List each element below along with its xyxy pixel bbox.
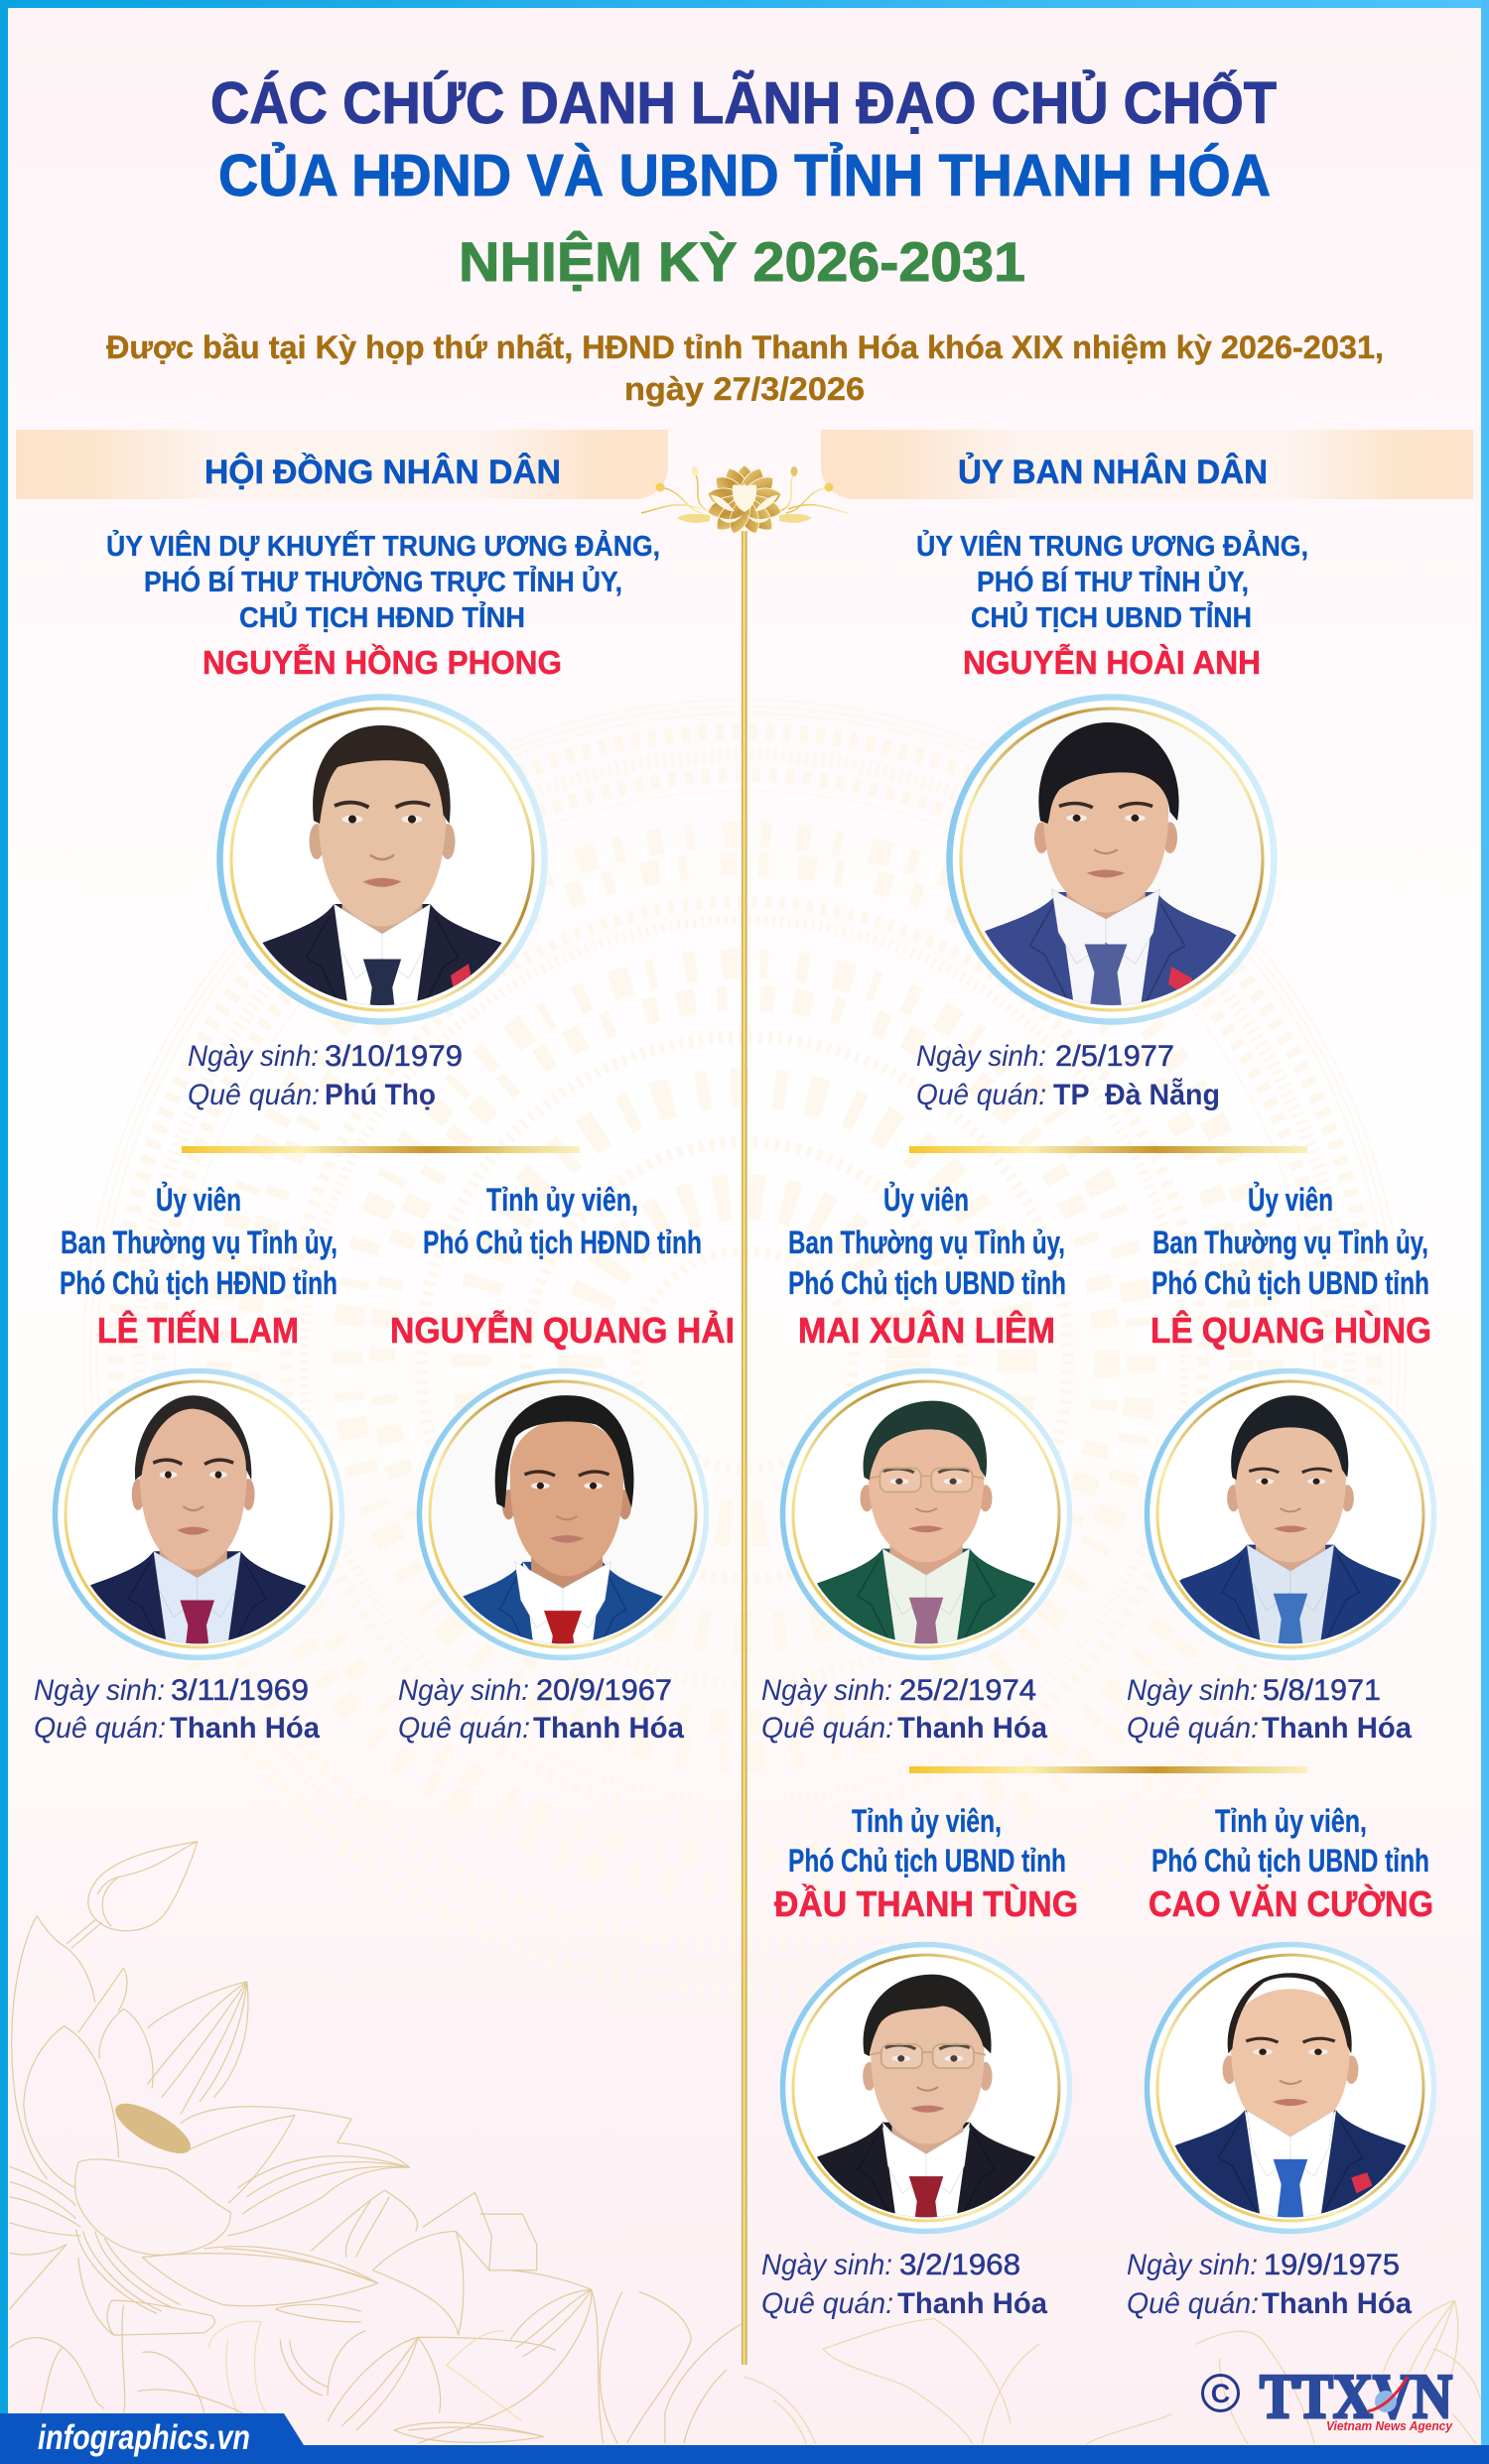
birth and hometown: Thanh Hóa [897,1712,1047,1745]
birth and hometown: Ngày sinh: [34,1674,165,1707]
title [210,69,1277,293]
title: NHIỆM KỲ 2026-2031 [459,230,1025,293]
section header: Ủy ban nhân dân [821,430,1473,499]
footer tab: infographics.vn: infographics.vn [38,2418,250,2457]
birth and hometown: 25/2/1974 [899,1674,1036,1707]
birth and hometown: Thanh Hóa [1262,2287,1412,2320]
portrait [52,1371,342,1682]
section header: Hội đồng nhân dân [16,430,668,499]
birth and hometown: Ngày sinh: [761,2249,892,2281]
role text: ỦY VIÊN DỰ KHUYẾT TRUNG ƯƠNG ĐẢNG, [106,529,660,563]
birth and hometown: Quê quán: [34,1712,166,1745]
name: LÊ QUANG HÙNG [1151,1309,1431,1351]
TTXVN logo: TTXVN [1260,2361,1452,2431]
birth and hometown: 3/10/1979 [325,1040,463,1073]
birth and hometown: Ngày sinh: [1127,2249,1258,2281]
birth and hometown: Ngày sinh: [398,1674,529,1707]
portrait [943,697,1275,1036]
section header: Hội đồng nhân dân: HỘI ĐỒNG NHÂN DÂN [204,453,561,491]
role text: PHÓ BÍ THƯ THƯỜNG TRỰC TỈNH ỦY, [144,565,622,598]
panel: UBND column [761,529,1443,2320]
footer tab: infographics.vn [0,2413,304,2464]
role text [1151,1803,1429,1879]
birth and hometown: Thanh Hóa [533,1712,684,1745]
icon: golden lotus [641,464,848,537]
role text [1151,1182,1429,1301]
name: NGUYỄN HỒNG PHONG [203,644,562,681]
role text: Tỉnh ủy viên, [1215,1803,1367,1839]
person: Mai Xuân Liêm [761,1182,1071,1745]
birth and hometown [916,1040,1220,1111]
birth and hometown: Ngày sinh: [761,1674,892,1707]
birth and hometown: Ngày sinh: [1127,1674,1258,1707]
birth and hometown: Phú Thọ [325,1079,436,1111]
panel: HĐND column [34,529,735,1745]
title: CÁC CHỨC DANH LÃNH ĐẠO CHỦ CHỐT [210,69,1277,136]
background: lotus line art bottom right [744,2300,1481,2444]
portrait [1146,1371,1435,1675]
role text [423,1182,702,1260]
role text: Phó Chủ tịch UBND tỉnh [788,1843,1066,1879]
role text: Tỉnh ủy viên, [486,1182,638,1218]
birth and hometown [34,1674,320,1745]
background: bronze drum pattern [83,700,1406,2021]
role text [788,1182,1066,1301]
name: LÊ TIẾN LAM [97,1309,299,1351]
birth and hometown: Quê quán: [1127,1712,1259,1745]
name: MAI XUÂN LIÊM [798,1309,1055,1351]
role text [106,529,660,634]
subtitle [106,329,1384,407]
portrait [220,697,544,1052]
role text: Phó Chủ tịch UBND tỉnh [788,1265,1066,1301]
role text [916,529,1308,634]
birth and hometown: 3/11/1969 [171,1674,309,1707]
role text: Phó Chủ tịch HĐND tỉnh [423,1225,702,1260]
role text: Tỉnh ủy viên, [852,1803,1002,1839]
role text: Ban Thường vụ Tỉnh ủy, [61,1225,338,1260]
birth and hometown: 2/5/1977 [1055,1040,1174,1073]
birth and hometown: Ngày sinh: [188,1040,319,1073]
role text [788,1803,1066,1879]
role text: CHỦ TỊCH UBND TỈNH [971,600,1252,634]
birth and hometown [188,1040,463,1111]
role text: Ủy viên [883,1182,969,1218]
portrait [1138,1945,1443,2241]
birth and hometown: Quê quán: [188,1079,320,1111]
role text: ỦY VIÊN TRUNG ƯƠNG ĐẢNG, [916,529,1308,563]
role text: Ủy viên [1248,1182,1333,1218]
birth and hometown: Quê quán: [761,1712,893,1745]
name: ĐẦU THANH TÙNG [774,1882,1078,1924]
person: Đầu Thanh Tùng [761,1803,1078,2320]
birth and hometown [761,1674,1047,1745]
name: NGUYỄN QUANG HẢI [390,1309,735,1351]
person: Nguyễn Hồng Phong [106,529,660,1111]
name: NGUYỄN HOÀI ANH [963,644,1261,681]
subtitle: Được bầu tại Kỳ họp thứ nhất, HĐND tỉnh Thanh Hóa khóa XIX nhiệm kỳ 2026-2031, [106,329,1384,365]
person: Nguyễn Hoài Anh [916,529,1308,1111]
copyright icon [1203,2376,1239,2411]
section header: Ủy ban nhân dân: ỦY BAN NHÂN DÂN [958,454,1268,491]
birth and hometown: 3/2/1968 [899,2249,1020,2281]
birth and hometown: Quê quán: [1127,2287,1259,2320]
portrait [781,1371,1071,1679]
birth and hometown [761,2249,1047,2320]
person: Lê Quang Hùng [1127,1182,1435,1745]
birth and hometown: Thanh Hóa [1262,1712,1412,1745]
role text: CHỦ TỊCH HĐND TỈNH [239,600,525,634]
birth and hometown: Quê quán: [761,2287,893,2320]
title: CỦA HĐND VÀ UBND TỈNH THANH HÓA [218,142,1271,208]
background: lotus line art bottom left [10,1842,744,2443]
birth and hometown: 5/8/1971 [1263,1674,1381,1707]
copyright icon: C [1211,2379,1230,2408]
TTXVN logo: Vietnam News Agency [1326,2418,1453,2433]
birth and hometown: Thanh Hóa [170,1712,320,1745]
birth and hometown [1127,1674,1412,1745]
name: CAO VĂN CƯỜNG [1149,1882,1433,1924]
birth and hometown [398,1674,684,1745]
person: Lê Tiến Lam [34,1182,342,1745]
role text: Ban Thường vụ Tỉnh ủy, [788,1225,1065,1260]
birth and hometown: Quê quán: [916,1079,1046,1111]
birth and hometown: 19/9/1975 [1264,2249,1400,2281]
role text: PHÓ BÍ THƯ TỈNH ỦY, [977,565,1249,598]
person: Nguyễn Quang Hải [390,1182,735,1745]
portrait [419,1371,707,1693]
subtitle: ngày 27/3/2026 [624,371,865,407]
central divider stem [742,531,746,2365]
birth and hometown: Ngày sinh: [916,1040,1046,1073]
person: Cao Văn Cường [1127,1803,1443,2320]
portrait [781,1945,1071,2259]
birth and hometown: TP Đà Nẵng [1053,1078,1220,1111]
role text [60,1182,338,1301]
birth and hometown: 20/9/1967 [536,1674,672,1707]
role text: Ủy viên [156,1182,241,1218]
role text: Phó Chủ tịch HĐND tỉnh [60,1265,338,1301]
birth and hometown: Thanh Hóa [897,2287,1047,2320]
birth and hometown: Quê quán: [398,1712,530,1745]
birth and hometown [1127,2249,1412,2320]
